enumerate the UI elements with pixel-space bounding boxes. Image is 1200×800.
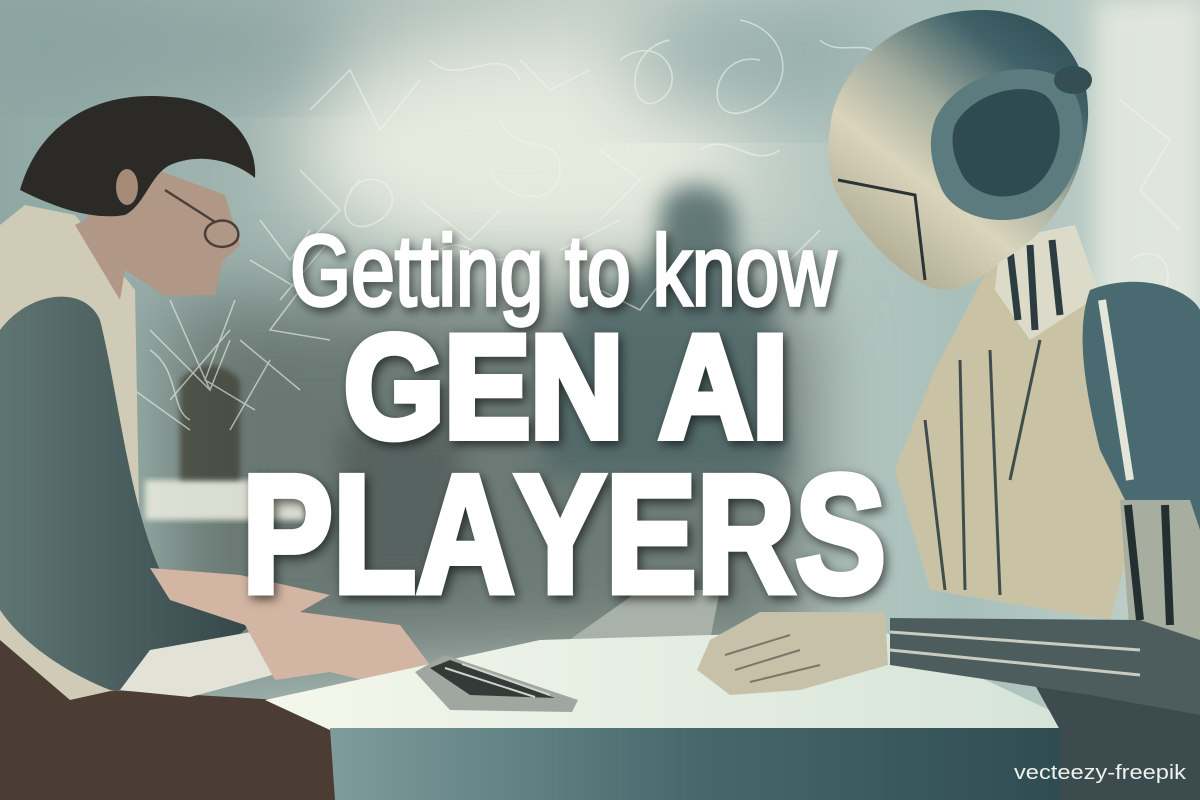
person: dark lower body (0, 640, 335, 800)
robot: ear ring (931, 69, 1082, 220)
title: PLAYERS: PLAYERS (242, 440, 886, 628)
robot: shoulder (1083, 282, 1200, 530)
robot: lower body (1010, 640, 1200, 800)
monitor on desk (555, 590, 720, 680)
desk (265, 630, 1060, 800)
desk: shaded front (330, 728, 1060, 800)
robot: hand (697, 612, 888, 695)
person: hair (20, 96, 255, 216)
robot: hair knob (1054, 66, 1092, 94)
image credit: vecteezy-freepik (1014, 762, 1187, 784)
robot: torso (895, 265, 1150, 620)
robot: ear disc (953, 89, 1060, 196)
person: ear with earring (116, 169, 138, 205)
robot: head (828, 10, 1088, 290)
robot: torso seams (925, 340, 1040, 595)
person: face and neck (75, 160, 240, 300)
title: GEN AI: GEN AI (344, 305, 788, 468)
robot: face seam (838, 180, 925, 280)
person: cream vest (0, 205, 160, 700)
robot (697, 10, 1200, 800)
person: woman typing at keyboard (0, 96, 430, 800)
robot: neck (995, 225, 1100, 340)
title: Getting to know: Getting to know (290, 215, 837, 327)
robot: upper arm (1120, 500, 1200, 640)
keyboard (415, 655, 578, 712)
person: hands (150, 568, 430, 690)
robot: forearm (890, 618, 1200, 715)
person: white cuff (120, 625, 310, 697)
person: dark sleeve (0, 297, 250, 690)
desk: white top (265, 630, 1060, 730)
person: glasses (165, 190, 238, 247)
